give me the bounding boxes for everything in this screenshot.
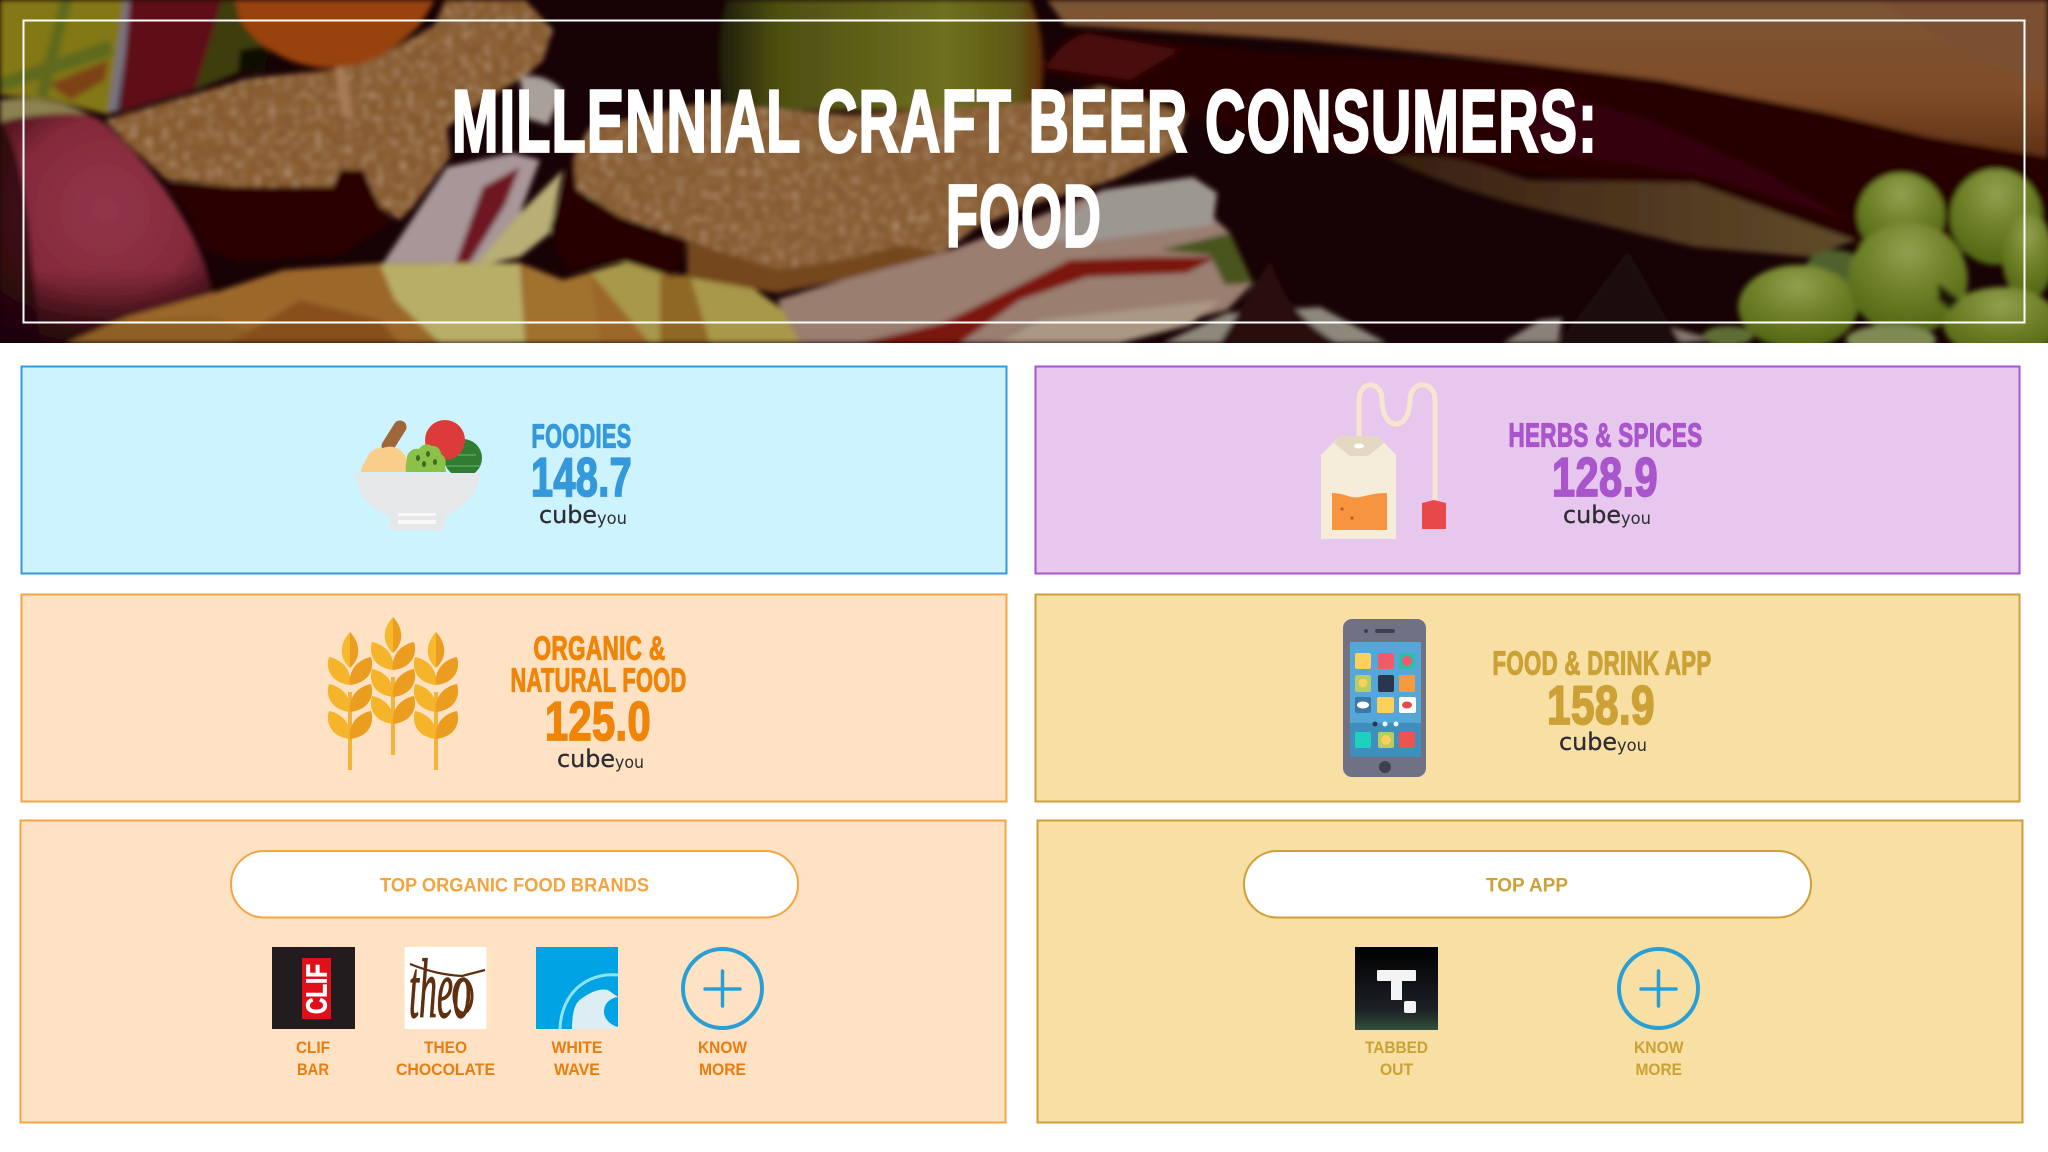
title — [452, 72, 1598, 266]
panel: top organic food brands — [20, 820, 1006, 1122]
hero banner: food photograph — [0, 0, 2048, 359]
brand: clif bar — [272, 947, 355, 1079]
score: foodies: 148.7 — [531, 446, 632, 508]
logo: cubeyou — [557, 745, 644, 773]
sandwich filling left — [383, 153, 540, 267]
icon: tea bag — [1321, 385, 1446, 539]
logo: cubeyou: you — [1621, 509, 1651, 529]
title: FOOD — [946, 166, 1102, 266]
hero white frame — [24, 20, 2024, 322]
heading: organic and natural food: ORGANIC & — [534, 630, 666, 668]
pear — [718, 0, 1043, 110]
heading: herbs and spices: HERBS & SPICES — [1508, 418, 1702, 454]
bun, fill, hollow — [1040, 33, 2048, 260]
brand: theo chocolate: theo — [409, 943, 471, 1036]
croissant — [62, 260, 652, 343]
bread slice one — [105, 0, 553, 220]
bread slice two — [569, 82, 1190, 274]
logo: cubeyou: you — [1617, 736, 1647, 756]
icon: smartphone — [1343, 619, 1426, 777]
pill heading: top app: TOP APP — [1486, 874, 1568, 896]
logo: cubeyou: cube — [557, 745, 615, 773]
logo: cubeyou — [1563, 501, 1651, 529]
panel: foodies — [22, 366, 1006, 574]
grapes — [1857, 173, 1945, 257]
score: organic and natural food: 125.0 — [545, 690, 651, 752]
score: food and drink app: 158.9 — [1547, 674, 1655, 736]
button: know more — [1619, 949, 1698, 1079]
icon: salad bowl — [355, 420, 482, 530]
heading: food and drink app: FOOD & DRINK APP — [1492, 646, 1712, 682]
plaid cloth — [0, 0, 125, 115]
logo: cubeyou: cube — [1563, 501, 1621, 529]
ham and tomato right — [777, 177, 1253, 343]
brand: white wave: WAVE — [554, 1061, 600, 1079]
pill heading: top organic food brands — [231, 851, 798, 918]
panel: herbs and spices — [1036, 366, 2020, 574]
apple — [0, 99, 215, 343]
brand: theo chocolate: CHOCOLATE — [396, 1061, 495, 1079]
panel: top app — [1038, 820, 2022, 1122]
brand: white wave — [536, 947, 618, 1079]
panel: food and drink app — [1036, 594, 2020, 802]
heading: organic and natural food: NATURAL FOOD — [510, 662, 686, 700]
logo: cubeyou — [539, 501, 627, 529]
brand: clif bar: BAR — [297, 1061, 329, 1079]
chocolate kisses — [1163, 307, 1387, 343]
heading: organic and natural food — [510, 630, 686, 700]
button: know more: MORE — [699, 1061, 746, 1079]
icon: wheat — [328, 617, 458, 770]
score: herbs and spices: 128.9 — [1552, 446, 1658, 508]
brand: theo chocolate — [396, 943, 495, 1079]
logo: cubeyou: cube — [1559, 728, 1617, 756]
brand: clif bar: CLIF — [302, 964, 334, 1014]
pill heading: top organic food brands: TOP ORGANIC FOOD BRANDS — [380, 874, 649, 896]
app: tabbed out: TABBED — [1365, 1039, 1428, 1057]
button: know more: MORE — [1636, 1061, 1682, 1079]
pill heading: top app — [1244, 851, 1811, 918]
app: tabbed out: OUT — [1380, 1061, 1413, 1079]
logo: cubeyou: you — [615, 753, 644, 773]
brand: white wave: WHITE — [552, 1039, 602, 1057]
logo: cubeyou: cube — [539, 501, 597, 529]
brand: theo chocolate: THEO — [424, 1039, 467, 1057]
logo: cubeyou — [1559, 728, 1647, 756]
button: know more — [683, 949, 762, 1079]
brand: clif bar: CLIF — [296, 1039, 330, 1057]
button: know more: KNOW — [698, 1039, 747, 1057]
button: know more: KNOW — [1634, 1039, 1684, 1057]
logo: cubeyou: you — [597, 509, 627, 529]
panel: organic and natural food — [22, 594, 1006, 802]
heading: foodies: FOODIES — [532, 418, 632, 456]
app: tabbed out — [1355, 947, 1438, 1079]
